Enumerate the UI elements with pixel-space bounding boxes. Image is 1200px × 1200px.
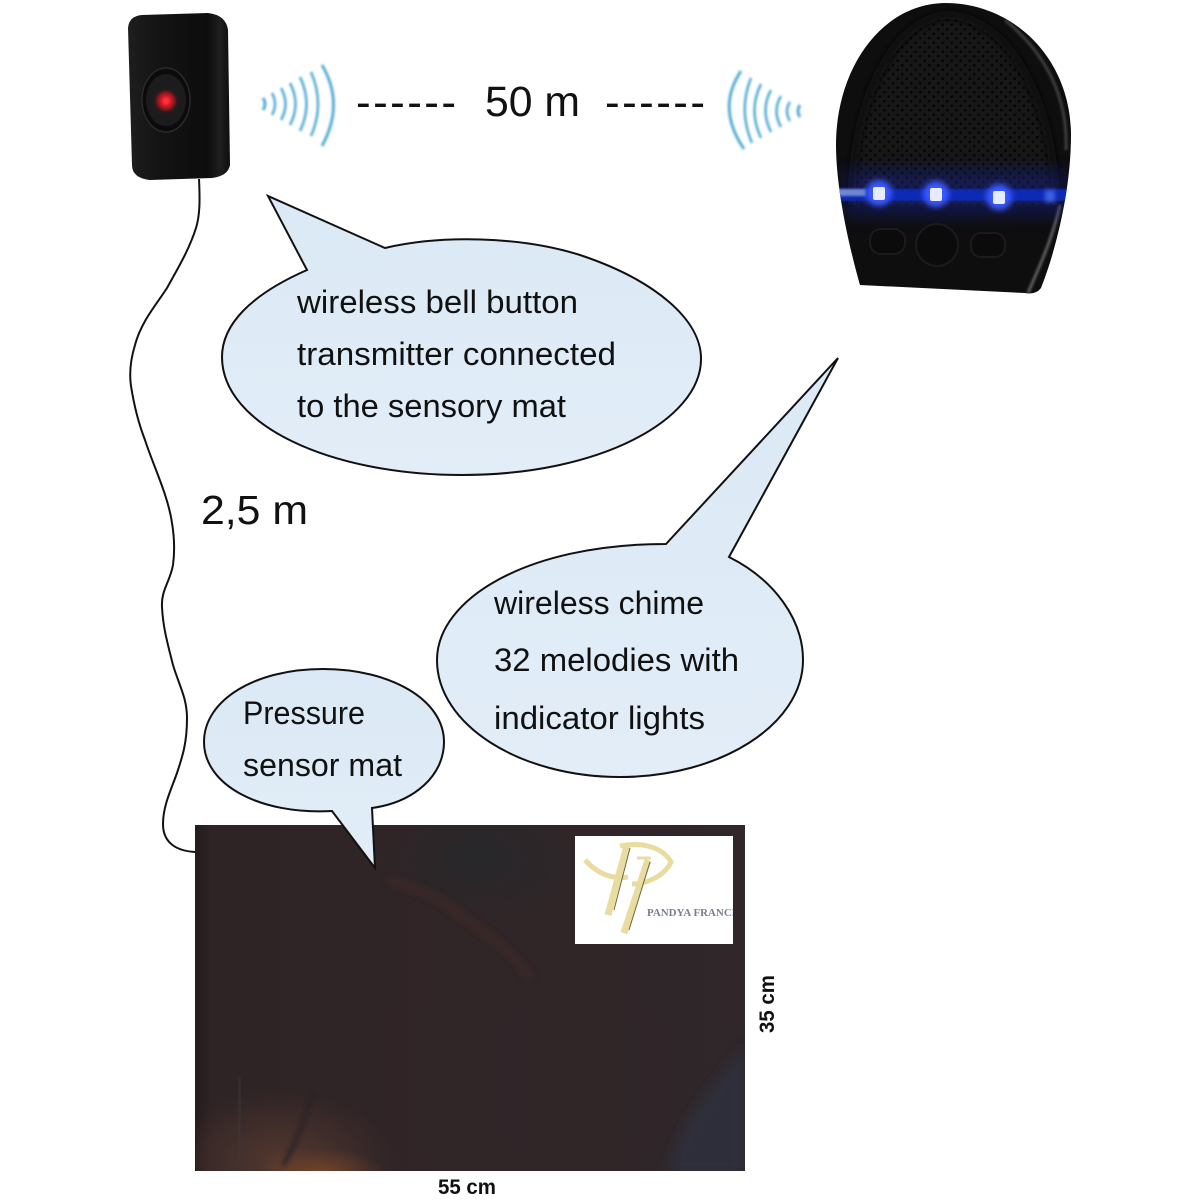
- callout text: wireless bell button: [296, 284, 578, 320]
- icon: wireless chime receiver: [830, 0, 1076, 300]
- blue glow: [845, 170, 1065, 216]
- dimension label: 35 cm: 35 cm: [756, 975, 779, 1033]
- callout: transmitter: [222, 196, 701, 475]
- button face: [146, 74, 186, 126]
- dashed line right: ------: [605, 78, 705, 127]
- callout text: [296, 284, 616, 424]
- distance label: 50 m: 50 m: [485, 78, 580, 126]
- dashed line left: ------: [356, 78, 456, 127]
- indicator lights: [866, 180, 1012, 210]
- icon: signal waves right: [729, 71, 800, 149]
- pressure sensor mat: [195, 825, 745, 1171]
- dimension label: 55 cm: 55 cm: [438, 1176, 496, 1199]
- infographic canvas: [128, 3, 1071, 1194]
- logo wordmark: PANDYA FRANCE: [647, 908, 739, 919]
- logo box: [575, 836, 739, 944]
- red indicator light: [157, 92, 175, 110]
- icon: signal waves left: [263, 65, 334, 146]
- callout text: wireless chime: [493, 585, 704, 621]
- control buttons: [870, 224, 1005, 266]
- mat highlight streak: [388, 880, 530, 978]
- callout text: indicator lights: [494, 700, 705, 736]
- callout text: 32 melodies with: [494, 642, 739, 678]
- callout text: sensor mat: [243, 747, 402, 783]
- callout text: to the sensory mat: [297, 388, 566, 424]
- callout text: [243, 695, 402, 783]
- cable length label: 2,5 m: 2,5 m: [201, 487, 308, 533]
- icon: wireless bell button transmitter: [128, 13, 230, 180]
- callout: pressure sensor mat: [204, 669, 444, 868]
- cable: [130, 179, 200, 852]
- callout text: transmitter connected: [297, 336, 616, 372]
- callout text: [493, 585, 739, 736]
- button ring: [142, 68, 190, 132]
- blue light strip: [836, 189, 1076, 201]
- logo monogram: [585, 845, 671, 933]
- mat top shade: [470, 854, 490, 866]
- callout text: Pressure: [243, 695, 365, 731]
- callout: chime: [437, 358, 838, 777]
- mat bottom-right blue tone: [669, 1056, 745, 1171]
- mat bottom-left tones: [196, 1106, 368, 1171]
